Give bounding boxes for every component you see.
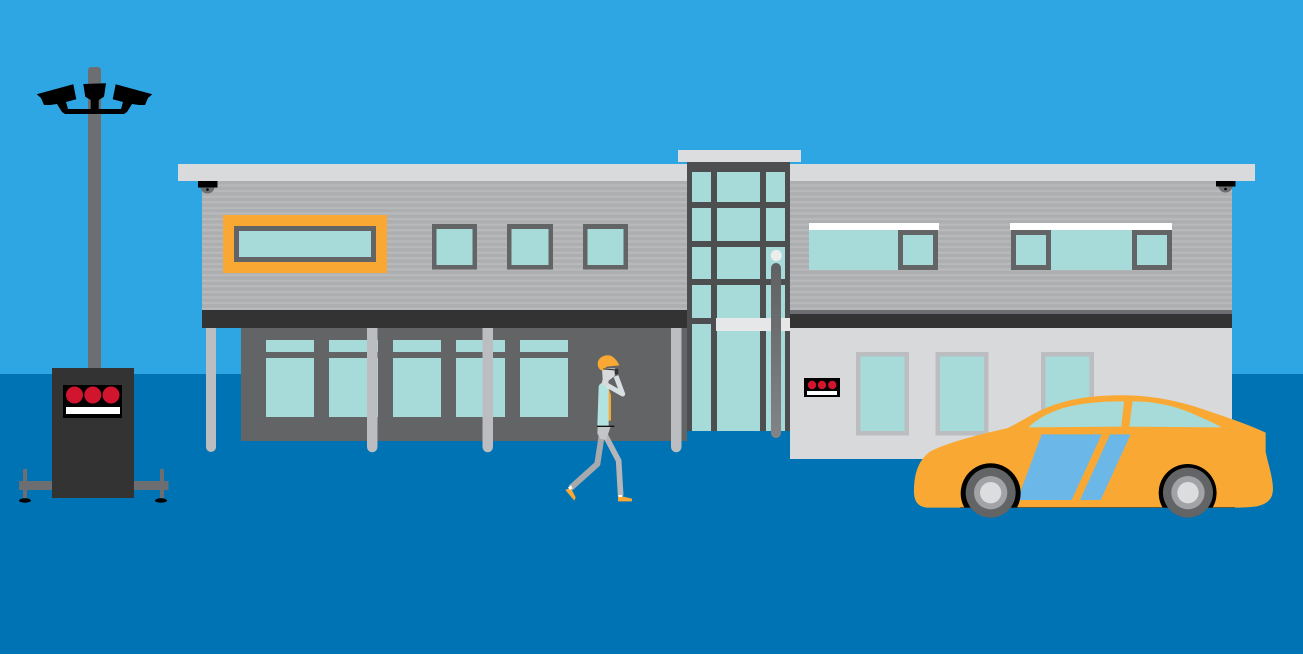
dome camera left: [198, 181, 218, 194]
wall alarm panel: [804, 378, 840, 397]
tower legs: [19, 469, 168, 498]
camera cluster: [37, 83, 152, 114]
glasses and phone: [603, 368, 616, 371]
far leg: [571, 433, 602, 488]
shoes: [565, 488, 576, 501]
upper left windows: [432, 224, 628, 270]
front door window: [1017, 434, 1102, 500]
belt: [597, 426, 614, 427]
underbody line: [960, 506, 1235, 509]
left siding: [202, 181, 687, 310]
shirt: [597, 383, 609, 426]
hard hat: [598, 355, 619, 371]
entrance canopy: [716, 318, 790, 331]
hips: [597, 427, 611, 440]
glass tower: [678, 150, 801, 431]
tower feet: [19, 498, 167, 503]
right dark band: [790, 310, 1232, 328]
front wheel: [966, 468, 1016, 518]
rear wheel: [1163, 468, 1213, 518]
socks: [568, 485, 572, 490]
wheel arches: [961, 463, 1217, 508]
face and neck: [601, 368, 615, 385]
security tower: [19, 67, 168, 503]
walking person on phone: [565, 355, 632, 501]
right siding: [790, 181, 1232, 310]
support columns: [206, 328, 682, 452]
right roof: [790, 164, 1255, 181]
building: [178, 150, 1255, 459]
orange strap: [608, 387, 611, 421]
rear window: [1129, 401, 1222, 427]
car: [914, 395, 1273, 518]
front windshield: [1028, 401, 1124, 427]
car body: [914, 395, 1273, 508]
lower right windows: [858, 354, 1092, 433]
tower cabinet: [52, 368, 134, 498]
left dark band: [202, 310, 687, 328]
lower right wall: [790, 328, 1232, 459]
dome camera right: [1216, 181, 1236, 192]
feature window with orange frame: [223, 215, 387, 273]
tower pole: [88, 67, 101, 372]
rear door window: [1080, 434, 1131, 500]
lower left wall: [241, 328, 687, 441]
arm: [607, 376, 623, 394]
left roof: [178, 164, 687, 181]
upper right window two: [1010, 223, 1172, 270]
near leg: [603, 432, 621, 496]
tower alarm panel: [63, 385, 122, 418]
ground: [0, 374, 1303, 654]
lamp post: [771, 250, 782, 438]
sky: [0, 0, 1303, 374]
upper right window one: [809, 223, 939, 270]
lower left windows: [266, 340, 568, 417]
